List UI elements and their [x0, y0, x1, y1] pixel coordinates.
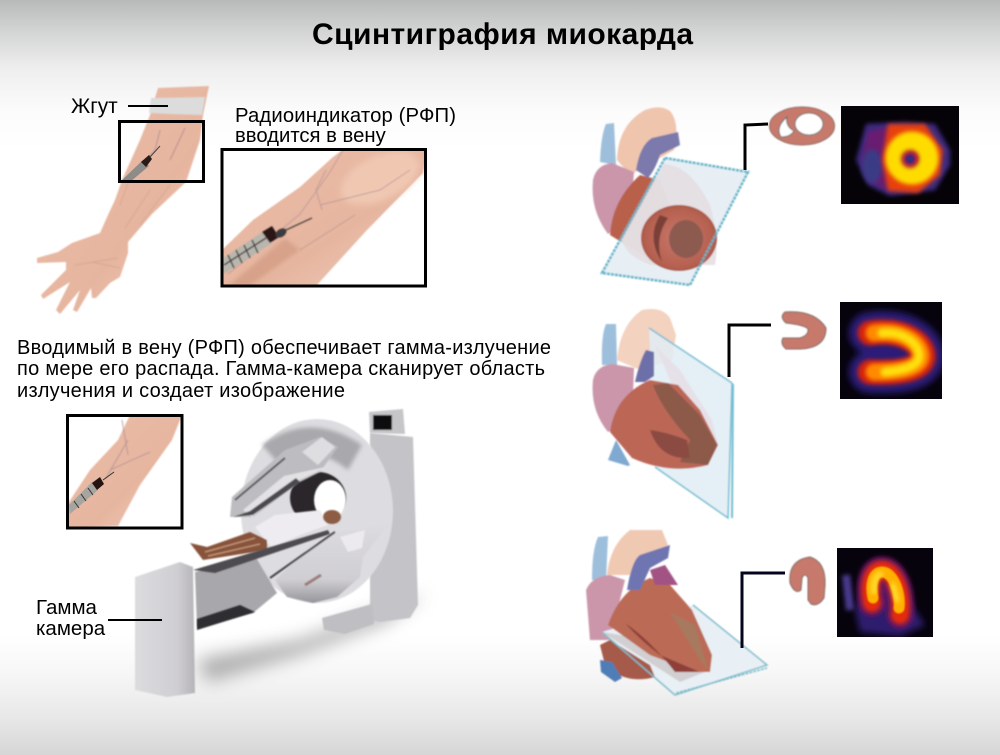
icon: arch section — [790, 557, 825, 605]
panel: arm with tourniquet — [37, 86, 209, 314]
icon: tourniquet band — [149, 97, 205, 115]
text block: radiotracer: Радиоиндикатор (РФП) — [235, 105, 456, 127]
illustration: arm and hand — [37, 86, 209, 314]
panel: injection inset — [67, 415, 182, 528]
patient table — [193, 530, 330, 573]
icon: syringe — [222, 218, 312, 274]
leader line: Жгут — [128, 105, 168, 107]
illustration: forearm inset — [67, 415, 182, 528]
monitor — [369, 409, 405, 434]
bore — [290, 472, 346, 524]
text block: gamma emission explanation: по мере его распада. Гамма-камера сканирует область — [17, 358, 545, 380]
illustration: heart with transverse plane — [593, 107, 748, 285]
label: gamma camera: Гамма — [36, 596, 98, 619]
callout box: small — [120, 122, 204, 182]
table base — [135, 562, 195, 697]
panel: enlarged injection — [222, 140, 428, 286]
icon: ring section — [770, 107, 834, 145]
label: Жгут: Жгут — [71, 95, 118, 118]
scan image: horizontal long axis — [840, 302, 942, 399]
scan image: vertical long axis — [837, 548, 933, 637]
scan image: short axis — [841, 106, 959, 204]
panel: short-axis view — [593, 106, 959, 285]
patient — [190, 510, 341, 560]
text block: gamma emission explanation: Вводимый в вену (РФП) обеспечивает гамма-излучение — [17, 337, 551, 359]
foot — [322, 604, 374, 634]
gantry ring — [241, 419, 393, 603]
illustration: forearm close-up — [224, 151, 424, 284]
panel: long-axis horizontal view — [586, 530, 933, 695]
table beam — [195, 556, 277, 627]
icon: inset syringe — [69, 472, 114, 514]
leader line — [745, 124, 768, 170]
illustration: gamma camera — [135, 409, 427, 697]
leader line — [742, 573, 785, 648]
callout box: inset — [68, 416, 182, 528]
floor shadow — [197, 593, 427, 682]
title: Сцинтиграфия миокарда — [312, 18, 693, 51]
illustration: heart with horizontal plane — [586, 530, 767, 695]
text block: gamma emission explanation: излучения и создает изображение — [17, 380, 345, 402]
text block: radiotracer: вводится в вену — [235, 125, 387, 147]
upper detector head — [230, 437, 338, 517]
pillar — [370, 433, 418, 622]
icon: small syringe — [121, 146, 160, 182]
label: gamma camera: камера — [36, 617, 106, 640]
callout box: large — [222, 150, 426, 286]
icon: horseshoe section — [782, 312, 826, 349]
lower detector head — [270, 525, 388, 603]
illustration: heart with vertical plane — [593, 309, 733, 518]
panel: long-axis vertical view — [593, 302, 942, 518]
leader line — [729, 325, 771, 377]
leader line: gamma camera — [108, 619, 162, 621]
